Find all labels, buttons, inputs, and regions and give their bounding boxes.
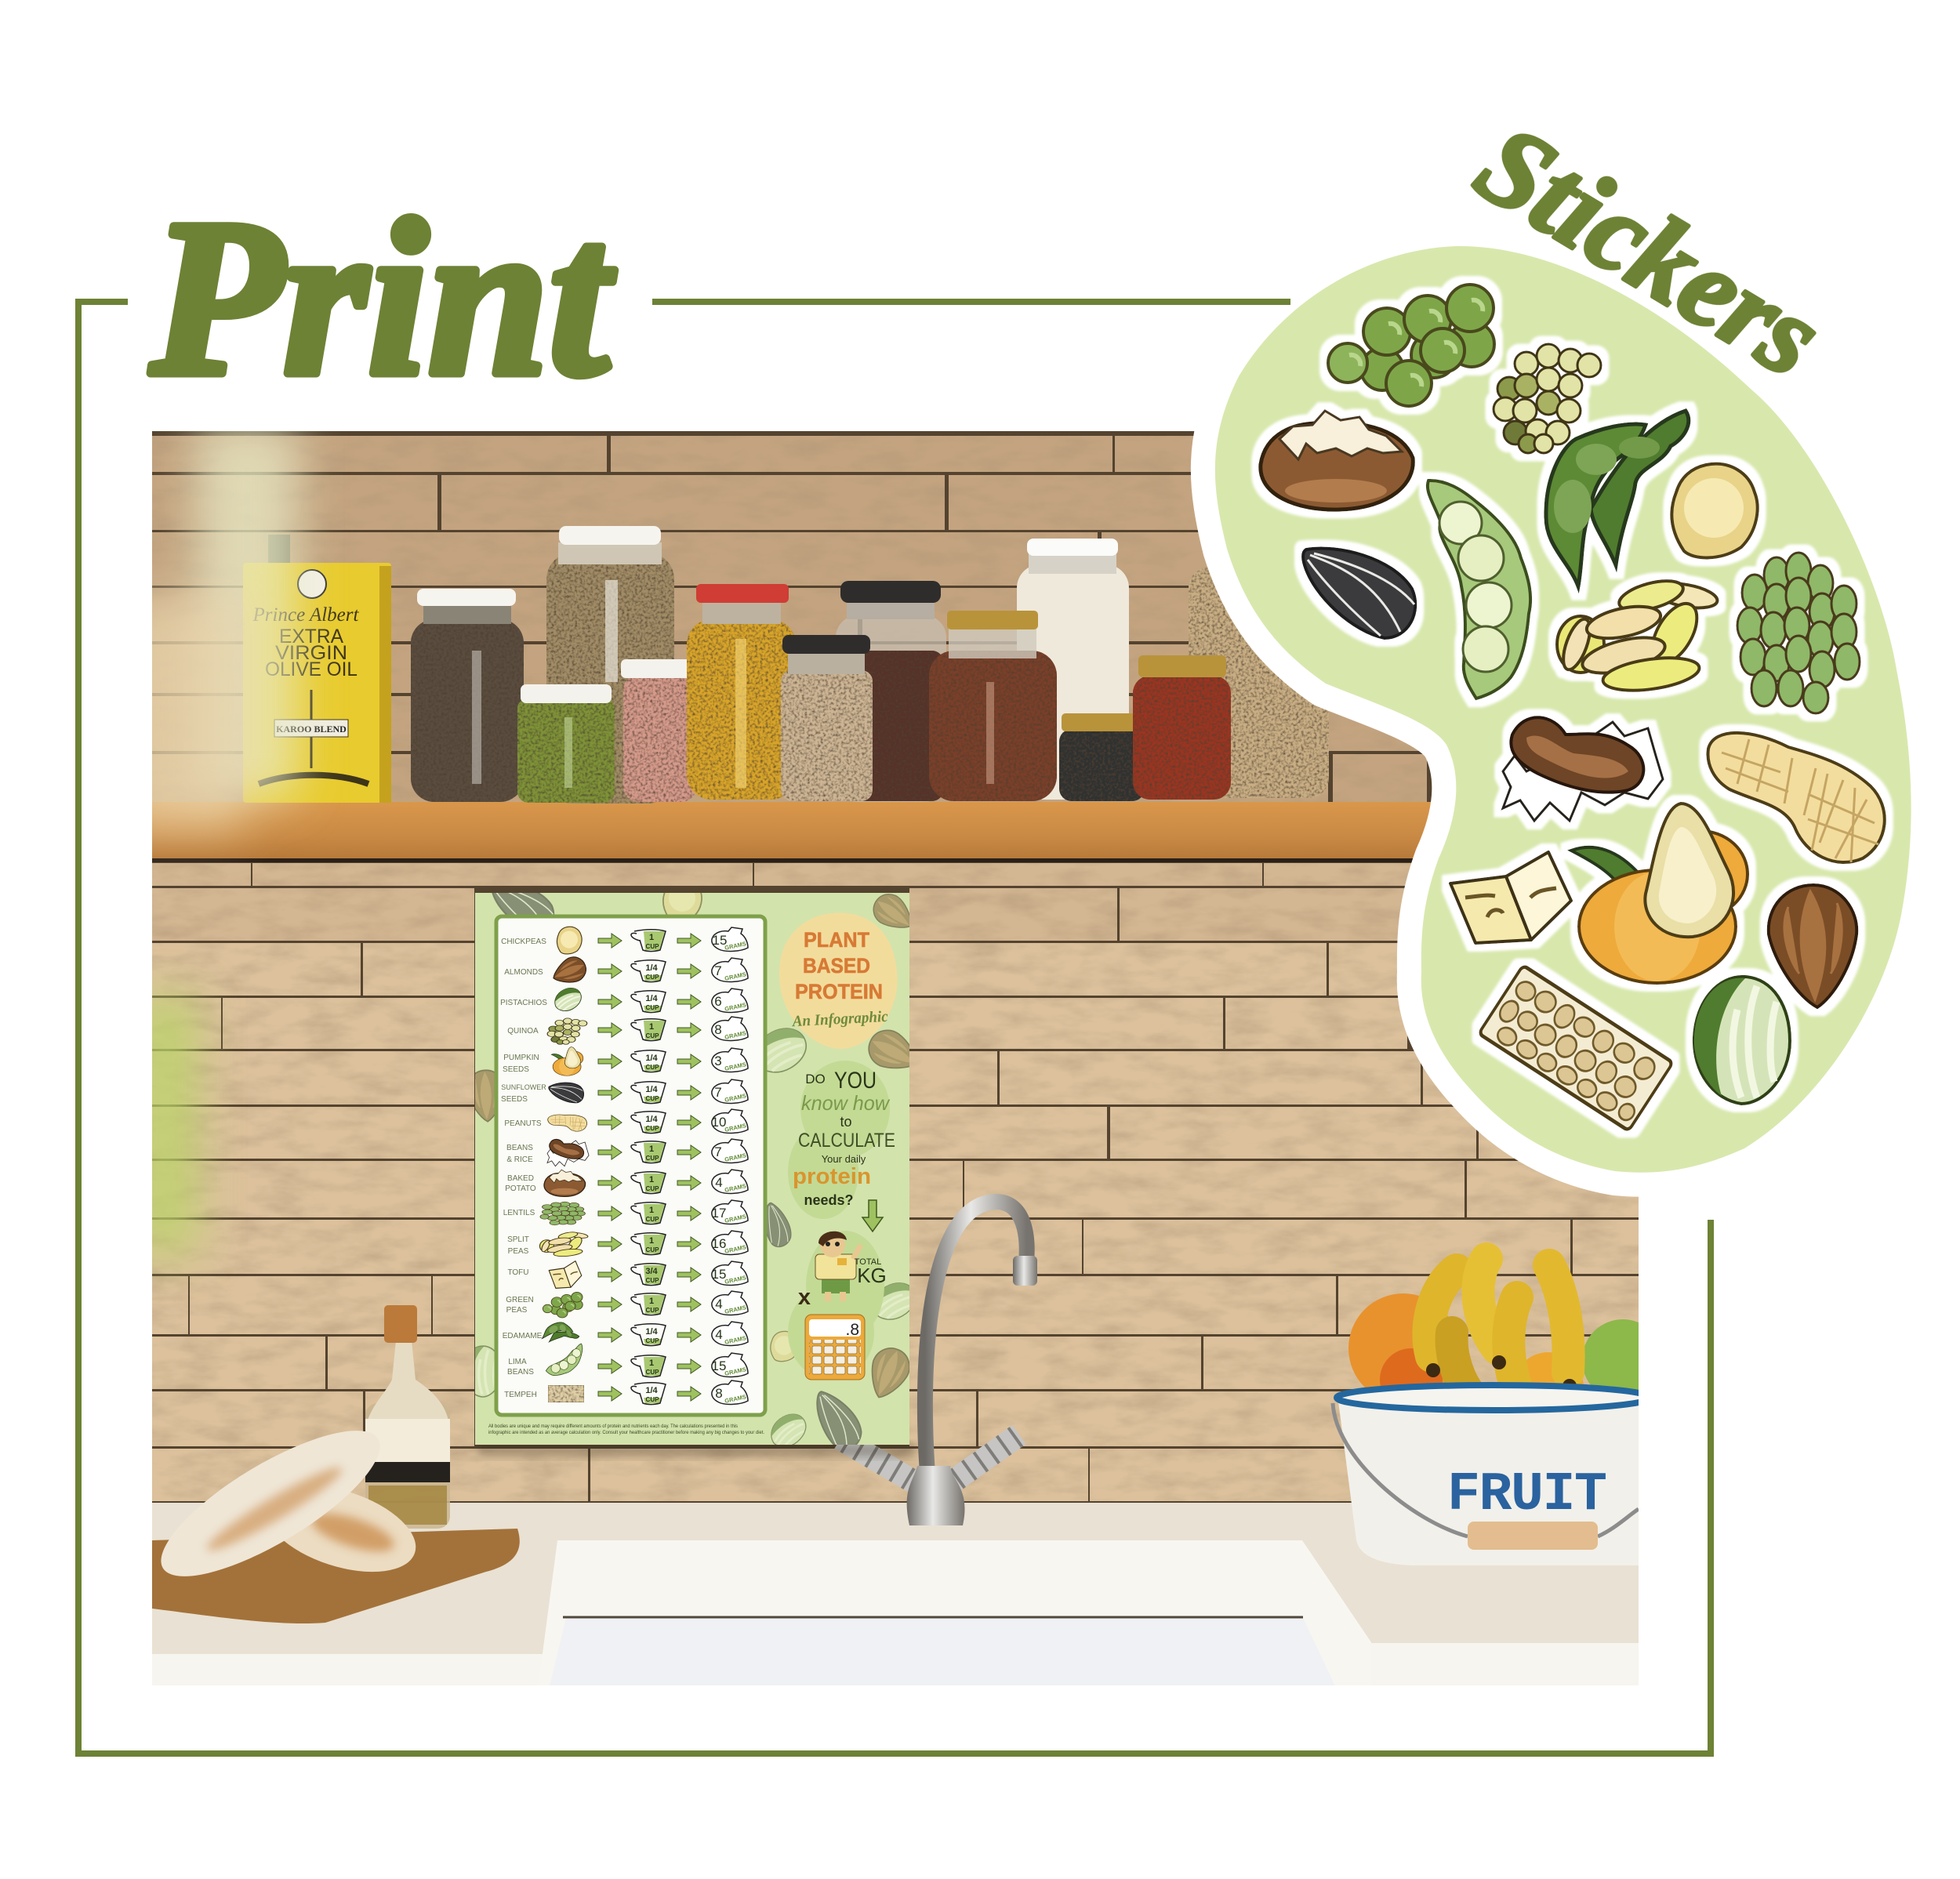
row: sunflower seeds: GRAMS bbox=[724, 1092, 747, 1104]
row: beans and rice: 1 bbox=[649, 1144, 654, 1154]
row: chickpeas: 15 bbox=[713, 933, 727, 948]
row: pumpkin seeds: 3 bbox=[714, 1054, 722, 1068]
olive oil label text: EXTRA bbox=[279, 626, 343, 647]
blurred foliage in foreground bbox=[118, 423, 298, 1254]
sticker blob bbox=[1215, 246, 1911, 1173]
poster title: BASED bbox=[803, 954, 870, 978]
multiply sign: x bbox=[798, 1285, 811, 1310]
row: lentils: CUP bbox=[646, 1216, 659, 1223]
row: lima beans bbox=[507, 1344, 748, 1380]
row: peanuts: GRAMS bbox=[724, 1122, 747, 1134]
row: baked potato bbox=[505, 1170, 748, 1196]
row: lentils: GRAMS bbox=[724, 1213, 747, 1224]
row: lima beans: 1 bbox=[649, 1358, 654, 1368]
bread loaves bbox=[143, 1406, 426, 1602]
poster question text: to bbox=[840, 1114, 852, 1130]
row: beans and rice bbox=[506, 1139, 748, 1166]
poster question text: protein bbox=[793, 1164, 871, 1189]
poster subtitle: An Infographic bbox=[790, 1008, 888, 1030]
row: split peas: 1 bbox=[649, 1236, 654, 1246]
row: pistachios: CUP bbox=[646, 1004, 659, 1011]
poster question text: Your daily bbox=[822, 1153, 866, 1165]
poster question text: needs? bbox=[804, 1192, 854, 1208]
row: green peas: 4 bbox=[715, 1297, 723, 1311]
row: quinoa: QUINOA bbox=[507, 1027, 539, 1036]
row: peanuts bbox=[504, 1108, 748, 1138]
jar: milk bbox=[1017, 539, 1129, 800]
jar: red quinoa bbox=[929, 611, 1057, 801]
row: pistachios: PISTACHIOS bbox=[500, 999, 547, 1007]
row: pistachios: 6 bbox=[714, 994, 722, 1009]
green frame lines bbox=[78, 302, 1711, 1754]
sticker: edamame bbox=[1546, 411, 1689, 586]
row: almonds: CUP bbox=[646, 974, 659, 981]
row: pumpkin seeds: 1/4 bbox=[645, 1054, 659, 1063]
row: beans and rice: BEANS bbox=[506, 1144, 533, 1152]
sticker: split peas bbox=[1557, 575, 1719, 695]
row: green peas bbox=[506, 1291, 748, 1318]
sticker: tofu bbox=[1450, 852, 1571, 943]
sink counter bbox=[152, 1503, 1642, 1691]
poster question text: DO bbox=[805, 1072, 826, 1086]
row: almonds: ALMONDS bbox=[504, 968, 543, 977]
row: baked potato: BAKED bbox=[507, 1174, 534, 1183]
sticker: pistachio bbox=[1694, 977, 1790, 1104]
poster white table panel bbox=[496, 916, 765, 1415]
row: lima beans: 15 bbox=[712, 1358, 726, 1373]
banana tips bbox=[1426, 1355, 1577, 1393]
row: pumpkin seeds: PUMPKIN bbox=[503, 1054, 539, 1062]
row: edamame: 4 bbox=[715, 1327, 723, 1342]
olive oil label text bbox=[252, 604, 360, 680]
row: tempeh bbox=[504, 1380, 748, 1405]
row: pistachios bbox=[500, 984, 748, 1016]
row: lentils bbox=[503, 1200, 748, 1225]
row: pistachios: 1/4 bbox=[645, 994, 659, 1003]
sticker: quinoa bbox=[1494, 344, 1601, 453]
row: lima beans: CUP bbox=[646, 1369, 659, 1376]
stickers bbox=[1261, 285, 1885, 1131]
poster question text: CALCULATE bbox=[798, 1130, 895, 1152]
row: quinoa: 8 bbox=[714, 1022, 722, 1037]
row: almonds bbox=[504, 953, 748, 988]
jar: pink salt bbox=[621, 659, 698, 802]
total kg text: KG bbox=[857, 1264, 887, 1287]
poster faded background icons bbox=[463, 878, 925, 1455]
poster footnote bbox=[488, 1424, 764, 1435]
sticker: baked potato bbox=[1261, 411, 1413, 510]
jar: black seeds bbox=[1059, 713, 1145, 801]
row: split peas bbox=[507, 1231, 748, 1257]
fruit in bucket bbox=[1348, 1259, 1664, 1423]
olive oil label text: OLIVE OIL bbox=[265, 658, 358, 680]
row: edamame: CUP bbox=[646, 1337, 659, 1344]
row: baked potato: 1 bbox=[649, 1175, 654, 1184]
row: peanuts: 1/4 bbox=[645, 1115, 659, 1124]
row: lima beans: LIMA bbox=[508, 1358, 527, 1366]
row: pumpkin seeds: CUP bbox=[646, 1064, 659, 1071]
poster footnote: All bodies are unique and may require different amounts of protein and nutrients each day. The calculations presented in this bbox=[488, 1424, 738, 1429]
row: beans and rice: & RICE bbox=[506, 1155, 533, 1164]
olive oil label text: Prince Albert bbox=[252, 604, 360, 626]
row: baked potato: GRAMS bbox=[724, 1182, 747, 1194]
row: edamame: 1/4 bbox=[645, 1327, 659, 1337]
row: sunflower seeds bbox=[501, 1076, 748, 1110]
row: green peas: GRAMS bbox=[724, 1304, 747, 1315]
row: split peas: CUP bbox=[646, 1246, 659, 1253]
row: green peas: GREEN bbox=[506, 1296, 534, 1304]
sticker: beans and rice bbox=[1503, 717, 1663, 821]
jar: beans bbox=[781, 635, 873, 801]
row: chickpeas: CUP bbox=[646, 943, 659, 950]
row: lentils: 1 bbox=[649, 1206, 654, 1215]
faucet bbox=[840, 1202, 1037, 1525]
row: pistachios: GRAMS bbox=[724, 1001, 747, 1013]
row: quinoa: GRAMS bbox=[724, 1029, 747, 1041]
row: peanuts: CUP bbox=[646, 1125, 659, 1132]
jar: tomato sauce bbox=[1133, 655, 1231, 800]
jar: tall seeds bbox=[546, 526, 674, 803]
olive oil label text: VIRGIN bbox=[275, 642, 347, 664]
row: quinoa bbox=[507, 1017, 748, 1044]
title: Stickers: Stickers bbox=[1457, 100, 1843, 401]
poster footnote: infographic are intended as an average calculation only. Consult your healthcare practitioner before making any big changes to your diet. bbox=[488, 1431, 764, 1435]
jar: chia bbox=[411, 589, 524, 802]
row: edamame: GRAMS bbox=[724, 1334, 747, 1346]
row: baked potato: 4 bbox=[715, 1175, 723, 1190]
row: sunflower seeds: 7 bbox=[714, 1085, 722, 1100]
row: green peas: 1 bbox=[649, 1297, 654, 1306]
row: peanuts: 10 bbox=[712, 1115, 726, 1130]
row: tofu: CUP bbox=[646, 1277, 659, 1284]
poster question text: know how bbox=[801, 1091, 891, 1115]
row: peanuts: PEANUTS bbox=[504, 1119, 542, 1128]
row: tofu: TOFU bbox=[507, 1268, 529, 1277]
row: chickpeas bbox=[501, 927, 748, 954]
row: beans and rice: CUP bbox=[646, 1155, 659, 1162]
poster question blobs bbox=[788, 1061, 890, 1380]
row: almonds: 1/4 bbox=[645, 963, 659, 973]
poster question text bbox=[793, 1068, 895, 1208]
row: sunflower seeds: 1/4 bbox=[645, 1085, 659, 1094]
poster title: PLANT bbox=[804, 928, 869, 952]
row: quinoa: CUP bbox=[646, 1032, 659, 1039]
olive oil bottle bbox=[365, 1305, 450, 1529]
row: tempeh: GRAMS bbox=[724, 1393, 747, 1405]
poster title: PROTEIN bbox=[795, 980, 883, 1003]
row: sunflower seeds: SUNFLOWER bbox=[501, 1083, 546, 1091]
row: baked potato: POTATO bbox=[505, 1184, 536, 1193]
row: lima beans: GRAMS bbox=[724, 1366, 747, 1377]
row: green peas: PEAS bbox=[506, 1306, 528, 1315]
poster title blob bbox=[779, 912, 898, 1049]
sink basin bbox=[538, 1540, 1371, 1689]
jar: yellow polenta bbox=[687, 584, 796, 800]
sticker: chickpea bbox=[1671, 464, 1758, 557]
row: green peas: CUP bbox=[646, 1307, 659, 1314]
row: split peas: 16 bbox=[712, 1236, 726, 1251]
row: tempeh: TEMPEH bbox=[504, 1391, 537, 1399]
frame line reaching the blob bbox=[1262, 299, 1290, 305]
fruit bucket bbox=[1333, 1385, 1650, 1565]
row: tofu bbox=[507, 1261, 748, 1288]
sticker: lentils bbox=[1737, 553, 1860, 713]
row: tempeh: CUP bbox=[646, 1396, 659, 1403]
row: pumpkin seeds bbox=[503, 1047, 748, 1076]
stone brick wall bbox=[152, 431, 1642, 1529]
row: lima beans: BEANS bbox=[507, 1368, 534, 1377]
row: tempeh: 1/4 bbox=[645, 1386, 659, 1395]
poster title bbox=[795, 928, 883, 1003]
poster question text: YOU bbox=[834, 1068, 877, 1094]
title: Print: Print bbox=[147, 173, 617, 422]
sticker: pumpkin bbox=[1571, 803, 1748, 983]
row: chickpeas: GRAMS bbox=[724, 940, 747, 952]
sticker: lima beans bbox=[1428, 481, 1530, 698]
kitchen photo scene bbox=[118, 423, 1664, 1691]
row: edamame bbox=[503, 1315, 748, 1355]
arrow down bbox=[862, 1200, 883, 1232]
row: pumpkin seeds: GRAMS bbox=[724, 1061, 747, 1072]
row: lentils: LENTILS bbox=[503, 1209, 535, 1217]
poster: plant based protein bbox=[463, 878, 925, 1455]
blend ribbon bbox=[274, 720, 348, 737]
row: almonds: GRAMS bbox=[724, 970, 747, 982]
total kg text: TOTAL bbox=[855, 1257, 881, 1267]
row: tofu: GRAMS bbox=[724, 1274, 747, 1286]
row: beans and rice: 7 bbox=[714, 1144, 722, 1159]
wooden shelf bbox=[152, 802, 1438, 858]
jar: dark grains bbox=[836, 581, 946, 802]
row: chickpeas: CHICKPEAS bbox=[501, 938, 546, 946]
row: sunflower seeds: SEEDS bbox=[501, 1095, 528, 1104]
bucket label: FRUIT bbox=[1447, 1464, 1607, 1526]
sticker: almond bbox=[1769, 885, 1857, 1007]
row: quinoa: 1 bbox=[649, 1022, 654, 1032]
bread board bbox=[152, 1529, 520, 1623]
row: lentils: 17 bbox=[712, 1206, 726, 1221]
calculator bbox=[805, 1315, 865, 1380]
row: tofu: 15 bbox=[712, 1267, 726, 1282]
row: almonds: 7 bbox=[714, 963, 722, 978]
sticker: sunflower seed bbox=[1303, 548, 1415, 638]
faucet handles bbox=[840, 1435, 1019, 1482]
row: tempeh: 8 bbox=[715, 1386, 723, 1401]
row: baked potato: CUP bbox=[646, 1185, 659, 1192]
row: sunflower seeds: CUP bbox=[646, 1095, 659, 1102]
row: beans and rice: GRAMS bbox=[724, 1152, 747, 1163]
row: pumpkin seeds: SEEDS bbox=[503, 1065, 529, 1074]
boy character bbox=[815, 1232, 861, 1301]
sticker: tempeh bbox=[1479, 965, 1673, 1131]
shadow under the poster bbox=[478, 1445, 914, 1456]
jar: oats bbox=[1189, 568, 1329, 798]
row: tofu: 3/4 bbox=[645, 1267, 659, 1276]
jars on the shelf bbox=[243, 526, 1329, 803]
row: split peas: SPLIT bbox=[507, 1235, 529, 1244]
row: edamame: EDAMAME bbox=[503, 1332, 543, 1340]
olive oil tin bbox=[243, 535, 391, 803]
jar: green powder bbox=[517, 684, 615, 803]
sticker: green peas bbox=[1328, 285, 1494, 406]
row: split peas: PEAS bbox=[508, 1247, 529, 1256]
row: split peas: GRAMS bbox=[724, 1243, 747, 1255]
blend ribbon: KAROO BLEND bbox=[276, 724, 347, 735]
row: chickpeas: 1 bbox=[649, 933, 654, 942]
sticker: peanut bbox=[1708, 733, 1885, 862]
calculator: .8 bbox=[845, 1321, 859, 1339]
